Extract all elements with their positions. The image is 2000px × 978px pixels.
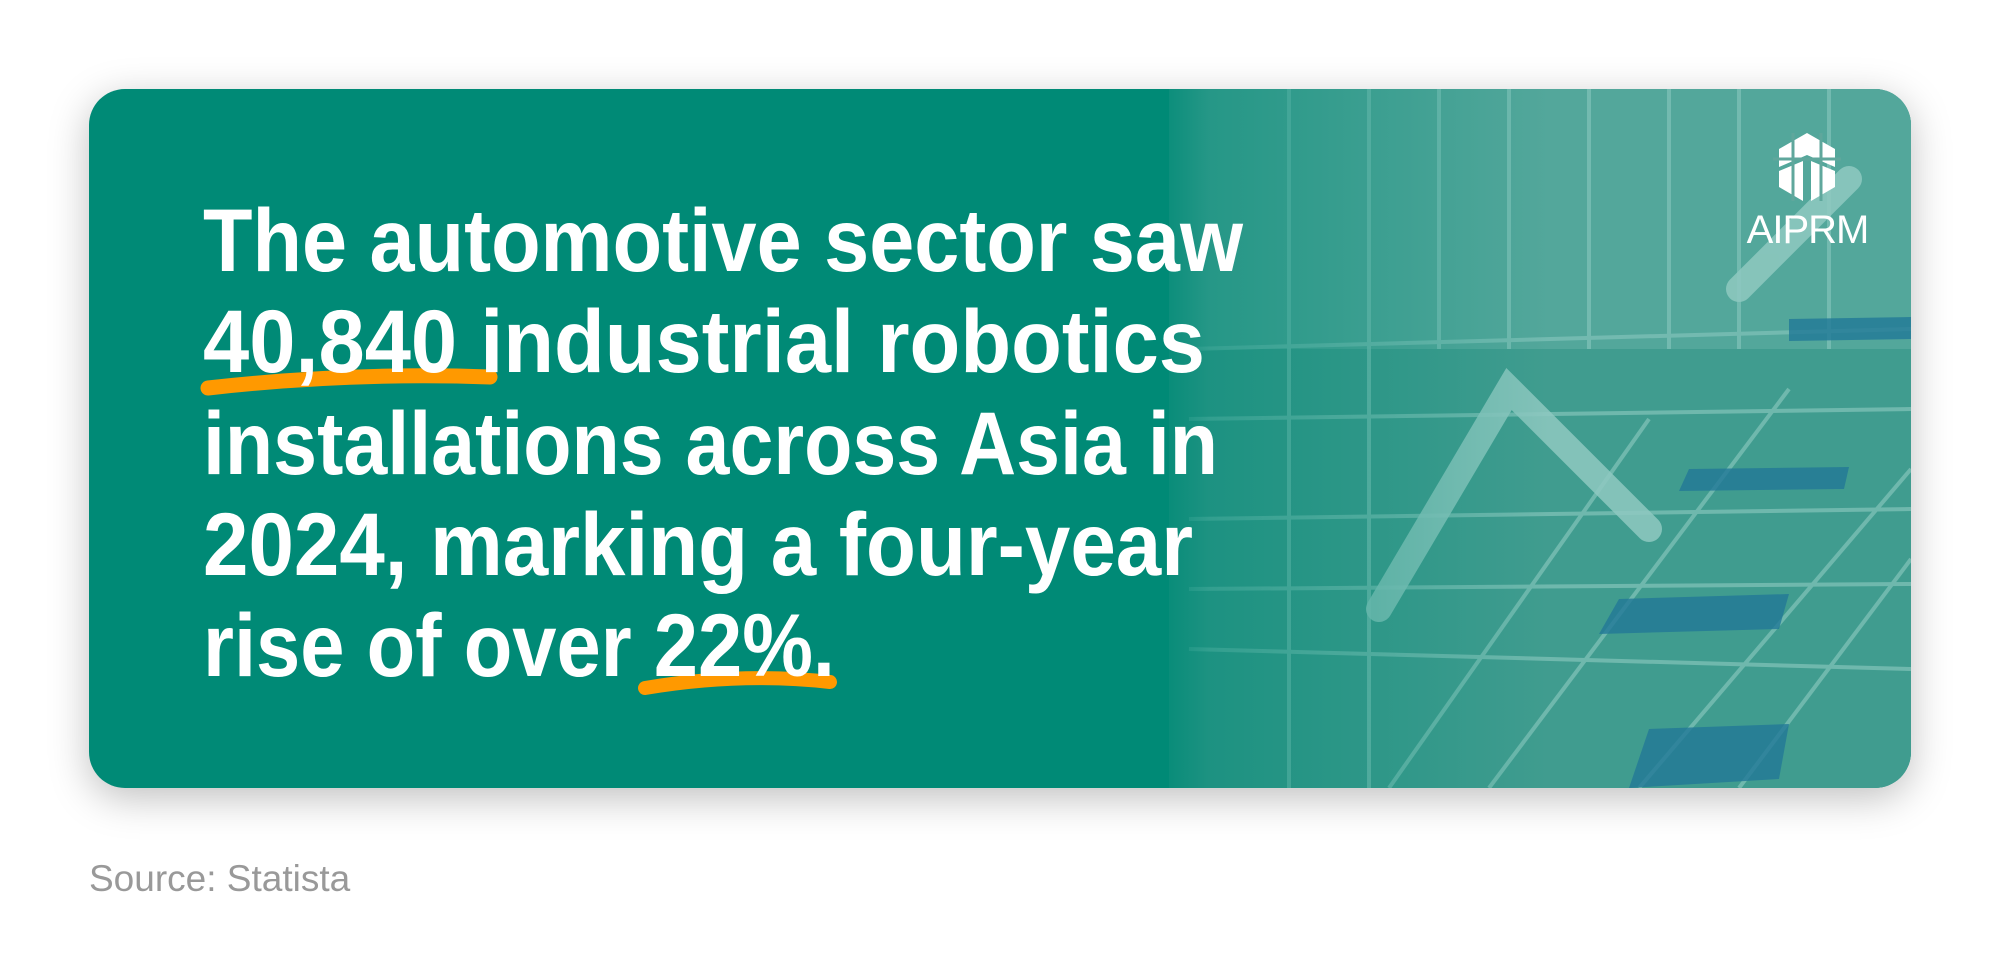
headline text: rise of over 22%. bbox=[203, 595, 835, 695]
headline text: The automotive sector saw bbox=[203, 190, 1244, 290]
logo: AIPRM bbox=[1746, 133, 1868, 252]
icon: logo mark bbox=[1773, 133, 1841, 201]
source note: Source: Statista bbox=[89, 858, 350, 899]
photo: factory background bbox=[1169, 89, 1911, 788]
underline: 40,840 bbox=[208, 376, 490, 388]
card panel bbox=[89, 89, 1911, 788]
underline: 22% bbox=[645, 678, 830, 688]
logo text: AIPRM bbox=[1747, 208, 1868, 252]
headline text: 2024, marking a four-year bbox=[203, 494, 1193, 594]
headline text: installations across Asia in bbox=[203, 393, 1218, 493]
headline text: 40,840 industrial robotics bbox=[203, 291, 1205, 391]
